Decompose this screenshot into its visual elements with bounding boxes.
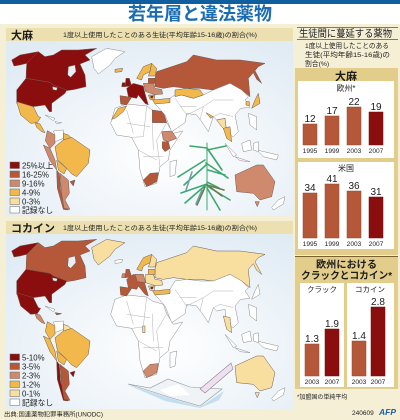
cannabis heading: 1度以上使用したことのある生徒(平均年齢15-16歳)の割合(%) xyxy=(63,30,257,39)
cocaine heading xyxy=(6,221,293,235)
bar chart: Europe cannabis: 22 xyxy=(348,97,360,108)
bar chart: Europe cannabis: 2003 xyxy=(347,148,362,155)
bar chart: US cannabis xyxy=(298,162,394,249)
bar chart: US cannabis: 36 xyxy=(348,181,360,192)
title: 若年層と違法薬物 xyxy=(128,3,272,24)
source note: 出典:国連薬物犯罪事務所(UNODC) xyxy=(4,410,103,418)
legend: cannabis: 25%以上 xyxy=(22,162,53,170)
bar chart: crack: 2007 xyxy=(325,379,340,386)
bar chart: cocaine: 2.8 xyxy=(371,297,385,308)
cocaine heading: 1度以上使用したことのある生徒(平均年齢15-16歳)の割合(%) xyxy=(63,223,257,232)
footnote: *加盟国の単純平均 xyxy=(297,393,347,401)
right column caption: 1度以上使用したことのある xyxy=(305,41,389,50)
crack and cocaine heading: クラックとコカイン* xyxy=(301,270,392,282)
logo: AFP: AFP xyxy=(378,407,396,417)
bar chart: Europe cannabis: 欧州* xyxy=(336,83,356,93)
legend: cannabis: 0-3% xyxy=(22,198,40,206)
crack and cocaine heading: 欧州における xyxy=(316,259,377,271)
legend: cocaine: 3-5% xyxy=(22,362,40,372)
bar chart: US cannabis: 米国 xyxy=(338,163,354,173)
bar chart: Europe cannabis: 17 xyxy=(326,106,338,117)
cannabis trends heading: 大麻 xyxy=(335,69,357,83)
world map: cannabis xyxy=(12,48,285,210)
bar chart: US cannabis: 34 xyxy=(304,183,316,194)
bar chart: cocaine: 1.4 xyxy=(352,331,366,342)
legend: cocaine: 5-10% xyxy=(22,354,45,362)
bar chart: US cannabis: 41 xyxy=(326,174,338,185)
legend: cannabis: 16-25% xyxy=(22,170,49,180)
bar chart: Europe cannabis: 2007 xyxy=(369,148,384,155)
top bar xyxy=(0,0,400,4)
right column caption: 割合(%) xyxy=(305,59,329,68)
icon: cocaine bag and tube xyxy=(128,363,233,408)
legend: cocaine: 記録なし xyxy=(22,398,53,408)
bar chart: crack: 1.3 xyxy=(305,334,319,345)
bar chart: crack xyxy=(300,283,344,387)
panel: cannabis trends xyxy=(295,68,398,255)
bar chart: Europe cannabis: 1995 xyxy=(303,148,318,155)
bar chart: crack: 1.9 xyxy=(325,319,339,330)
bar chart: cocaine: 2003 xyxy=(352,379,367,386)
panel: crack and cocaine in Europe xyxy=(295,256,398,389)
bar chart: Europe cannabis: 19 xyxy=(370,102,382,113)
panel: cocaine map xyxy=(6,221,293,409)
bar chart: crack: クラック xyxy=(307,285,337,294)
legend: cannabis: 記録なし xyxy=(22,205,53,215)
date code: 240609 xyxy=(352,410,374,417)
cocaine heading: コカイン xyxy=(11,222,55,235)
world map: cocaine xyxy=(12,239,285,401)
bar chart: Europe cannabis: 12 xyxy=(304,114,316,125)
right column caption: 生徒(平均年齢15-16歳)の xyxy=(305,50,390,59)
legend: cocaine: 1-2% xyxy=(22,380,40,390)
legend: cocaine xyxy=(10,354,53,408)
cannabis heading: 大麻 xyxy=(11,28,33,42)
bar chart: US cannabis: 2003 xyxy=(347,241,362,248)
icon: cannabis plant xyxy=(178,143,230,210)
bar chart: crack: 2003 xyxy=(305,379,320,386)
legend: cocaine: 0-1% xyxy=(22,390,40,398)
bar chart: US cannabis: 1999 xyxy=(325,241,340,248)
bar chart: cocaine: 2007 xyxy=(371,379,386,386)
bar chart: US cannabis: 31 xyxy=(370,187,382,198)
cannabis heading xyxy=(6,28,293,42)
bar chart: US cannabis: 1995 xyxy=(303,241,318,248)
right column heading: 生徒間に蔓延する薬物 xyxy=(299,27,392,40)
bar chart: cocaine: コカイン xyxy=(355,285,385,294)
legend: cannabis: 9-16% xyxy=(22,180,45,188)
bar chart: Europe cannabis: 1999 xyxy=(325,148,340,155)
bar chart: cocaine xyxy=(347,283,394,387)
legend: cocaine: 2-3% xyxy=(22,372,40,380)
panel: cannabis map xyxy=(6,28,293,216)
legend: cannabis: 4-9% xyxy=(22,188,40,198)
bar chart: Europe cannabis xyxy=(298,81,394,158)
bar chart: US cannabis: 2007 xyxy=(369,241,384,248)
legend: cannabis xyxy=(10,162,53,215)
